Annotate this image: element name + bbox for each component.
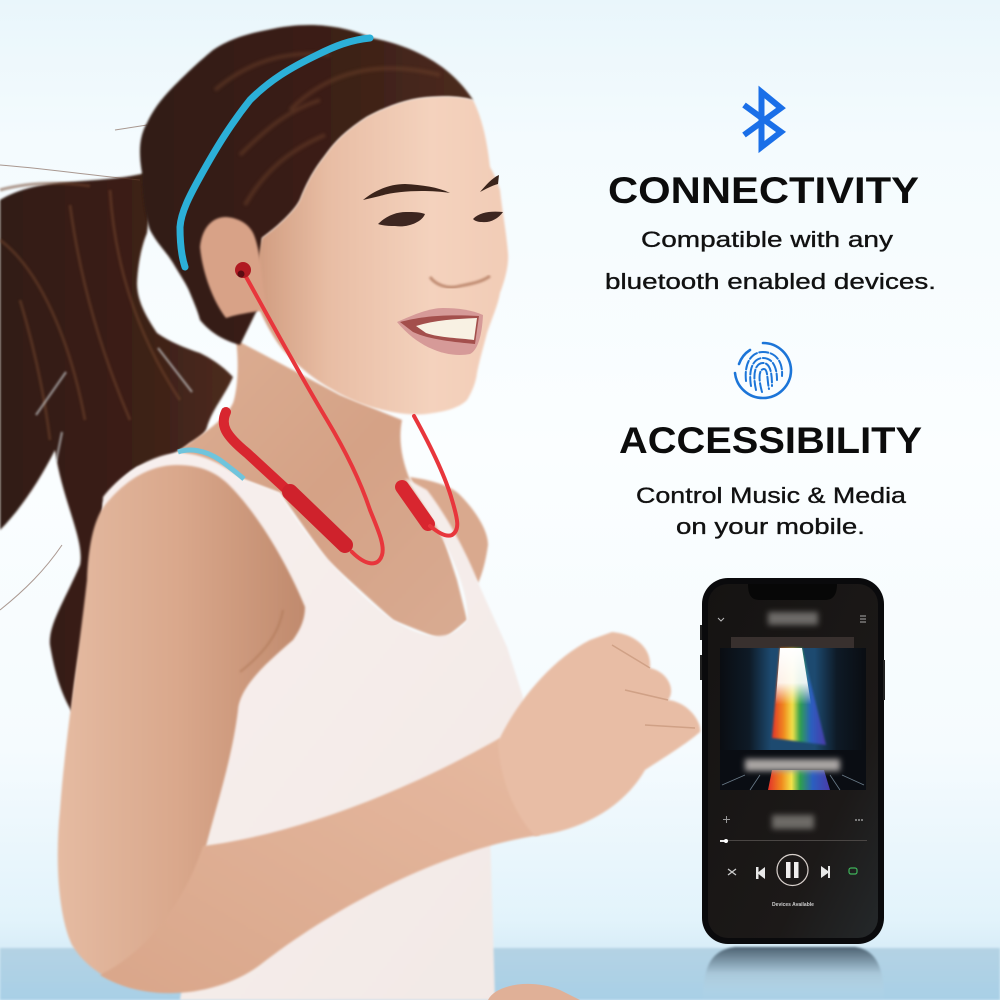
hand [498,632,700,836]
ear [200,217,268,318]
smile [397,308,483,355]
lower hand [488,984,580,1000]
heading: connectivity: CONNECTIVITY [608,170,919,211]
white tank top [100,453,526,1000]
hair highlights [215,54,440,205]
track title blur [772,815,814,829]
armpit fold [240,610,283,672]
text: connectivity line 1: Compatible with any [641,227,893,252]
playback controls [728,854,857,886]
progress bar [720,839,867,843]
notch [748,584,837,600]
album top strip [731,637,854,648]
eyes [378,212,503,226]
eyebrows [363,175,499,200]
forearm [100,738,540,993]
blue bra strap [178,450,244,479]
right shoulder [410,477,488,583]
heading: accessibility: ACCESSIBILITY [619,420,922,461]
icon: bluetooth [744,92,781,147]
finger lines [612,645,695,728]
phone screen [708,584,878,938]
nose shadow [430,276,490,287]
icon: fingerprint [735,343,791,398]
album art [720,648,866,790]
phone [701,578,884,944]
phone body [702,578,884,944]
side buttons [701,625,884,700]
face [252,97,508,414]
earbud [235,262,251,278]
plus and more [723,816,863,823]
neck and chest [177,340,467,640]
photo: running woman [0,25,700,1000]
upper arm [58,465,305,991]
hair top [140,25,473,345]
top bar [718,612,866,625]
rainbow beam [772,648,826,745]
text: connectivity line 2: bluetooth enabled devices. [605,269,936,294]
red neckband earphones [224,275,457,563]
text: accessibility line 2: on your mobile. [676,514,865,539]
devices available: Devices Available [772,902,814,908]
ponytail hair [0,125,233,712]
blue headband [180,38,370,267]
phone reflection [703,947,884,1000]
text: accessibility line 1: Control Music & Media [636,483,907,508]
